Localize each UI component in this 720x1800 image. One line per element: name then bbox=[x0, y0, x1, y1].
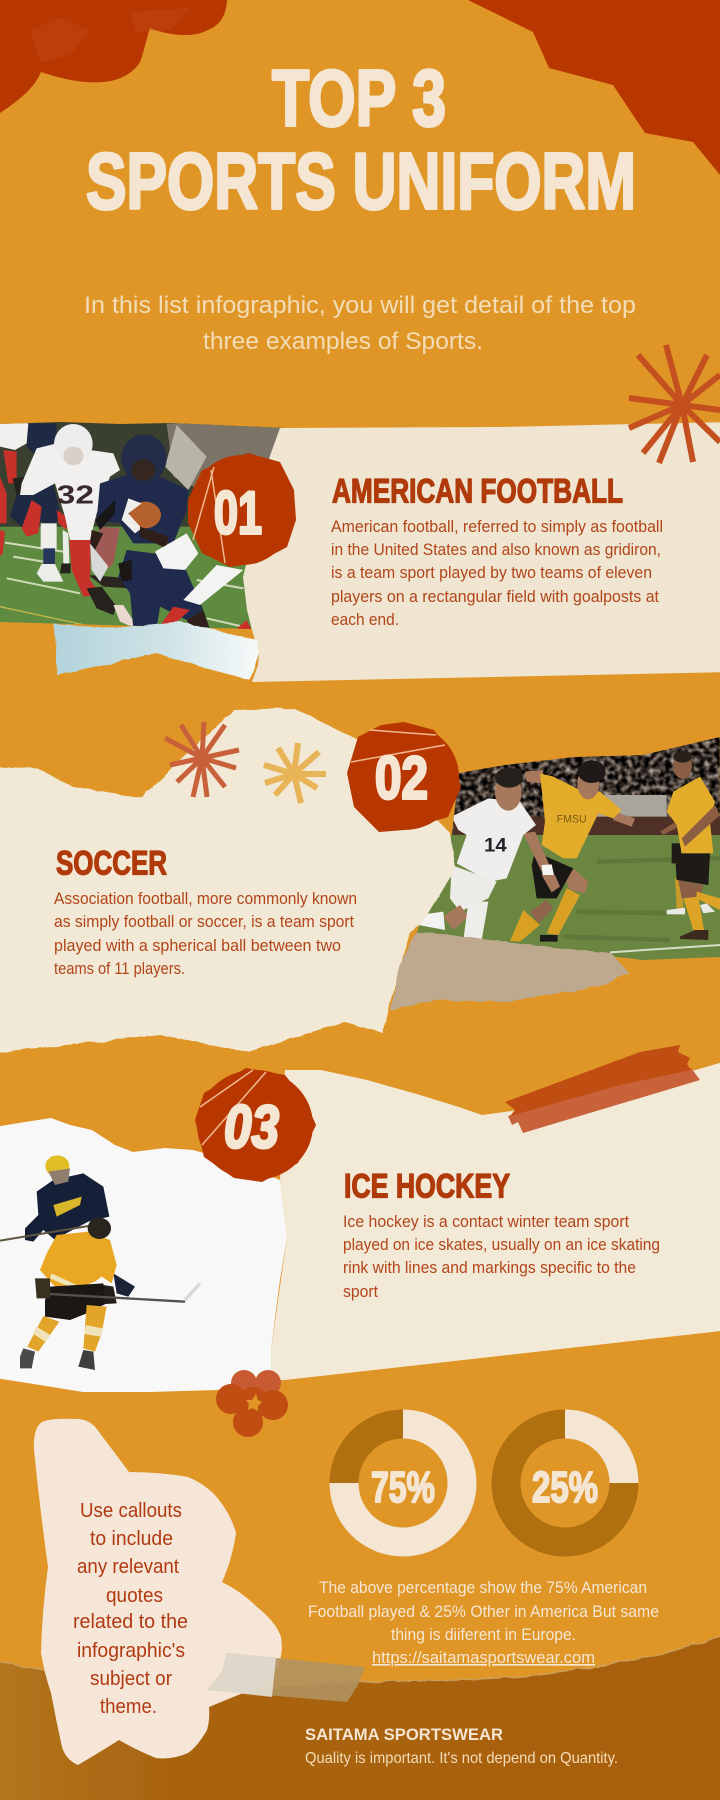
donut chart: 75% bbox=[344, 1424, 462, 1542]
stats caption bbox=[308, 1579, 659, 1667]
callout text bbox=[73, 1499, 188, 1718]
footer text: Quality is important. It's not depend on Quantity. bbox=[305, 1750, 618, 1767]
donut chart: 25% bbox=[506, 1424, 624, 1542]
cream paper bbox=[243, 422, 720, 682]
heading: AMERICAN FOOTBALL bbox=[332, 472, 623, 510]
body text: in the United States and also known as gridiron, bbox=[331, 541, 661, 559]
icon: flower bbox=[216, 1370, 288, 1437]
callout bbox=[34, 1419, 282, 1765]
cream paper bbox=[269, 1060, 720, 1380]
donut chart: 25%: 25% bbox=[532, 1463, 598, 1512]
callout text: subject or bbox=[90, 1667, 172, 1690]
intro text: three examples of Sports. bbox=[203, 328, 483, 355]
callout text: to include bbox=[90, 1527, 173, 1550]
photo: football players: 32 bbox=[57, 479, 94, 509]
body text: rink with lines and markings specific to the bbox=[343, 1259, 636, 1277]
footer text: SAITAMA SPORTSWEAR bbox=[305, 1725, 503, 1744]
body text: each end. bbox=[331, 611, 399, 629]
stats caption: The above percentage show the 75% American bbox=[319, 1579, 647, 1597]
photo: hockey players bbox=[0, 1118, 287, 1392]
donut chart: 75%: 75% bbox=[371, 1463, 435, 1512]
body text: played with a spherical ball between two bbox=[54, 937, 341, 955]
body text bbox=[331, 518, 663, 629]
callout text: Use callouts bbox=[80, 1499, 182, 1522]
decoration: top-left blob bbox=[0, 0, 227, 113]
icon: brush stroke bbox=[505, 1045, 700, 1133]
badge 03: 03 bbox=[224, 1094, 279, 1160]
icon: starburst yellow bbox=[264, 743, 326, 803]
heading: ICE HOCKEY bbox=[344, 1168, 510, 1206]
icon: large starburst bbox=[629, 345, 720, 463]
panel: soccer bbox=[0, 708, 720, 1053]
body text: Association football, more commonly known bbox=[54, 890, 357, 908]
body text: sport bbox=[343, 1283, 378, 1301]
photo: football players bbox=[0, 420, 287, 637]
callout text: theme. bbox=[100, 1695, 157, 1718]
torn kraft paper bbox=[390, 932, 629, 1010]
body text: as simply football or soccer, is a team sport bbox=[54, 913, 354, 931]
cream paper bbox=[0, 708, 455, 1053]
callout text: any relevant bbox=[77, 1555, 179, 1578]
photo: soccer players bbox=[410, 735, 720, 962]
photo: soccer players: 14 bbox=[484, 836, 507, 857]
badge 03 bbox=[195, 1068, 316, 1182]
badge 02 bbox=[347, 722, 461, 832]
title bbox=[86, 54, 636, 226]
body text: American football, referred to simply as football bbox=[331, 518, 663, 536]
body text: Ice hockey is a contact winter team sport bbox=[343, 1213, 629, 1231]
stats caption: thing is diiferent in Europe. bbox=[391, 1626, 576, 1644]
badge 02: 02 bbox=[375, 744, 428, 812]
footer band bbox=[0, 1634, 720, 1800]
title: TOP 3 bbox=[272, 54, 446, 142]
body text: is a team sport played by two teams of eleven bbox=[331, 564, 652, 582]
body text bbox=[54, 890, 357, 978]
body text bbox=[343, 1213, 660, 1301]
body text: players on a rectangular field with goalposts at bbox=[331, 588, 659, 606]
stats caption: https://saitamasportswear.com bbox=[372, 1649, 595, 1667]
callout text: infographic's bbox=[77, 1639, 185, 1662]
photo: soccer players: FMSU bbox=[557, 813, 587, 825]
stats caption: Football played & 25% Other in America But same bbox=[308, 1603, 659, 1621]
footer text bbox=[305, 1725, 618, 1767]
badge 01 bbox=[188, 453, 296, 567]
intro text: In this list infographic, you will get detail of the top bbox=[84, 292, 636, 319]
callout text: related to the bbox=[73, 1610, 188, 1633]
panel: ice hockey bbox=[0, 1045, 720, 1392]
callout text: quotes bbox=[106, 1584, 163, 1607]
torn blue paper bbox=[55, 622, 259, 680]
tape bbox=[207, 1653, 365, 1702]
panel: american football bbox=[0, 420, 720, 682]
icon: starburst red bbox=[165, 722, 239, 797]
badge 01: 01 bbox=[214, 480, 262, 546]
intro text bbox=[84, 292, 636, 355]
body text: played on ice skates, usually on an ice skating bbox=[343, 1236, 660, 1254]
body text: teams of 11 players. bbox=[54, 960, 185, 978]
heading: SOCCER bbox=[56, 844, 167, 882]
decoration: top-right torn shape bbox=[468, 0, 720, 175]
